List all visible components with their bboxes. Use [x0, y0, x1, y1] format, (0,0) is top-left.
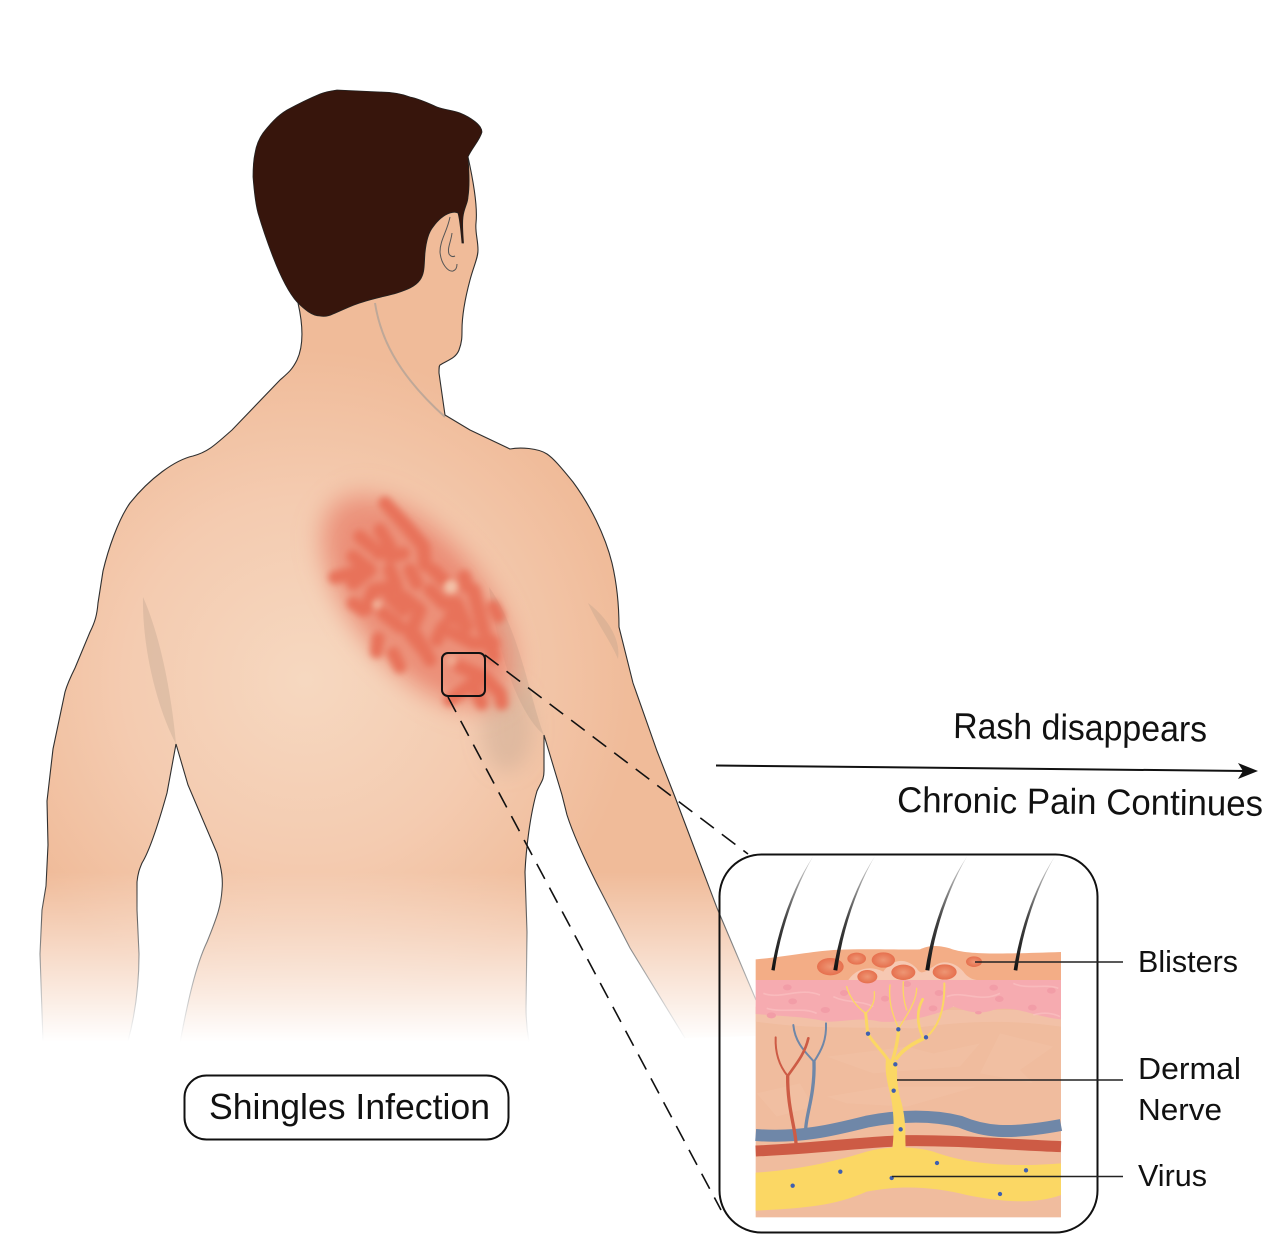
hair — [253, 90, 482, 316]
subcutaneous nerve band — [756, 1147, 1061, 1211]
caption: Shingles Infection — [184, 1076, 508, 1140]
label: Blisters: Blisters — [1138, 944, 1238, 979]
rash light spots — [372, 580, 457, 666]
inset panel frame — [720, 854, 1098, 1232]
magnifier box on rash — [442, 653, 485, 696]
leader line: virus — [892, 1176, 1123, 1178]
leader line: blisters — [975, 961, 1123, 963]
pink layer texture — [763, 983, 1060, 1017]
virus particles — [790, 1027, 1028, 1196]
epidermis — [756, 946, 1061, 980]
hairs — [771, 856, 1055, 971]
dashed zoom lines — [448, 655, 748, 1210]
ear lines — [440, 217, 457, 271]
blister domes — [848, 961, 977, 980]
heading: Chronic Pain Continues: Chronic Pain Continues — [897, 779, 1263, 824]
neck tendon line — [375, 303, 445, 417]
rash blotches — [335, 503, 502, 703]
rash glow — [286, 462, 551, 742]
label: Dermal Nerve: Dermal — [1138, 1051, 1241, 1086]
body silhouette — [40, 157, 756, 1043]
dermis pale band under pink layer — [756, 1010, 1061, 1028]
figure: man's back — [40, 157, 756, 1043]
caption: Shingles Infection: Shingles Infection — [209, 1086, 490, 1127]
red vessel trunk — [788, 1076, 796, 1143]
blisters — [817, 952, 982, 983]
dermal nerve — [847, 982, 944, 1148]
timeline arrow — [716, 763, 1258, 779]
blood vessel branches — [776, 1023, 826, 1132]
label: Virus: Virus — [1138, 1158, 1207, 1193]
label: Dermal Nerve: Nerve — [1138, 1092, 1222, 1127]
muscle shadows — [143, 587, 618, 772]
leader line: dermal nerve — [897, 1079, 1123, 1081]
vein — [756, 1117, 1061, 1136]
dermis texture — [757, 1033, 1053, 1117]
dermis pink layer — [756, 980, 1061, 1022]
heading: Rash disappears: Rash disappears — [953, 705, 1207, 750]
rash — [286, 462, 551, 742]
label: Dermal Nerve — [1138, 1051, 1241, 1127]
skin cross-section — [756, 856, 1061, 1217]
artery — [756, 1141, 1061, 1151]
pink layer spots — [767, 981, 1056, 1018]
dermis base — [756, 1007, 1061, 1217]
